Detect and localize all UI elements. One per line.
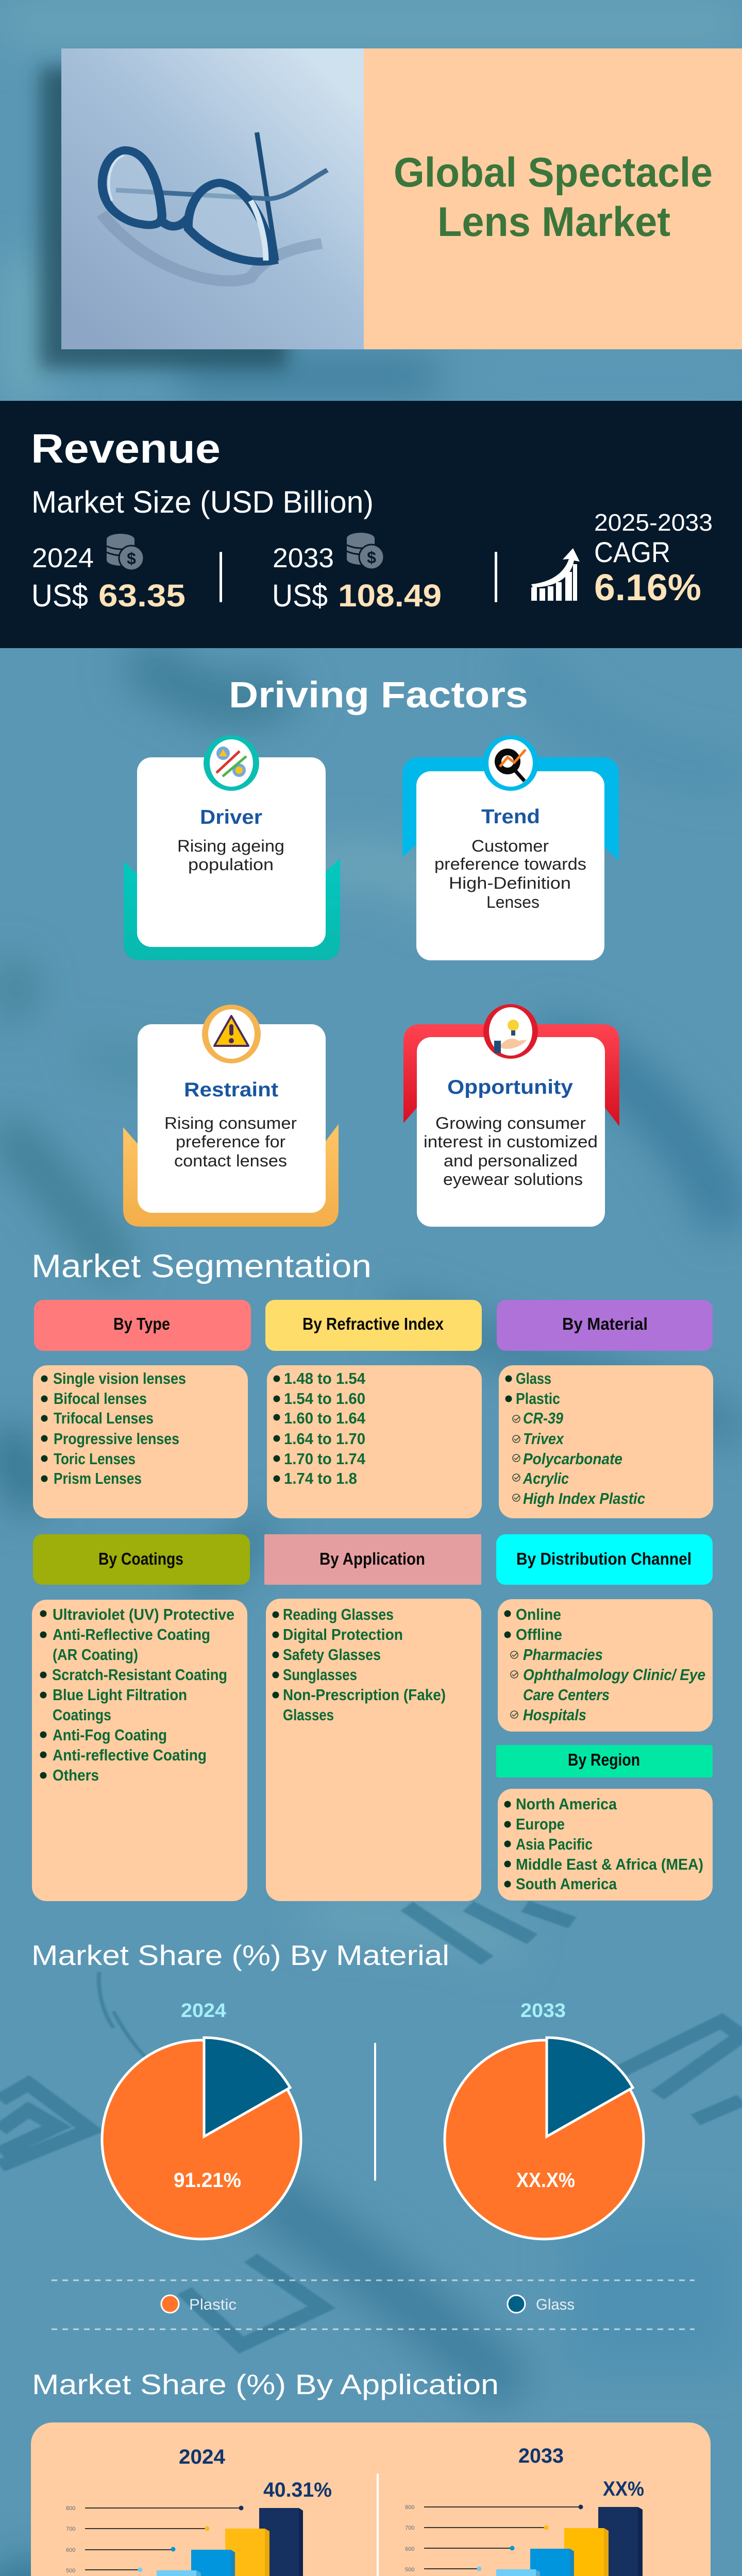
card: restraint: preference for	[176, 1132, 285, 1151]
bar chart 2033	[405, 2445, 644, 2576]
legend: material: Plastic	[189, 2296, 237, 2313]
segment: by coatings: Blue Light Filtration	[53, 1686, 187, 1704]
segment: by type: Trifocal Lenses	[54, 1409, 154, 1427]
card: opportunity: interest in customized	[424, 1132, 598, 1151]
bar chart 2033: 800	[405, 2504, 414, 2511]
chart: pie 2024: 91.21%	[174, 2169, 241, 2192]
chart: pie 2033: 2033	[520, 2000, 566, 2022]
segment: by type: By Type	[113, 1314, 170, 1333]
chart: pie 2033	[445, 2000, 644, 2239]
bar chart 2024: 700	[66, 2526, 75, 2532]
segment: by coatings: (AR Coating)	[53, 1646, 138, 1664]
segment: by type: Toric Lenses	[54, 1450, 136, 1468]
card: trend	[402, 735, 619, 960]
2033 value	[272, 543, 442, 613]
segment: by refractive index: 1.48 to 1.54	[284, 1369, 366, 1387]
segment: by application: Reading Glasses	[283, 1605, 394, 1623]
segment: by application: Sunglasses	[283, 1666, 357, 1684]
title panel: Lens Market	[437, 199, 670, 245]
segment: by type: Bifocal lenses	[54, 1389, 147, 1408]
CAGR block: 2025-2033	[594, 509, 713, 536]
chart: pie 2033: XX.X%	[516, 2169, 575, 2192]
icon: coins 2033	[347, 533, 384, 569]
2024 value: US$	[31, 578, 88, 613]
icon: coins 2024: $	[127, 549, 136, 568]
chart: pie 2024: 2024	[181, 2000, 226, 2022]
segment: by distribution channel: Online	[516, 1605, 561, 1623]
icon: coins 2033: $	[367, 548, 376, 567]
2033 value: 2033	[273, 543, 334, 573]
heading: driving factors: Driving Factors	[229, 675, 528, 716]
segment: by distribution channel: Pharmacies	[523, 1646, 603, 1664]
segment: by distribution channel: Ophthalmology Clinic/ Eye	[523, 1666, 705, 1684]
icon: driver	[204, 735, 259, 791]
segment: by refractive index: 1.54 to 1.60	[284, 1389, 365, 1408]
card: driver: population	[188, 855, 274, 874]
bar chart 2033: 2033	[518, 2445, 564, 2467]
segment: by region: North America	[516, 1795, 617, 1813]
hero photo: spectacles	[61, 48, 364, 349]
card: trend: Customer	[471, 837, 549, 855]
segment: by refractive index: 1.70 to 1.74	[284, 1450, 366, 1468]
card: driver: Rising ageing	[177, 837, 284, 855]
2033 value: 108.49	[338, 578, 442, 613]
segment: by distribution channel: Hospitals	[523, 1706, 586, 1724]
segment: by coatings: Anti-Reflective Coating	[53, 1625, 210, 1643]
card: opportunity: Opportunity	[447, 1076, 573, 1098]
bar chart 2033: 600	[405, 2546, 414, 2552]
segment: by type	[33, 1300, 251, 1518]
hero panel	[40, 48, 742, 368]
segment: by distribution channel	[496, 1534, 713, 1732]
segment: by material: By Material	[562, 1314, 648, 1333]
chart: pie 2024	[102, 2000, 301, 2239]
segment: by region: South America	[516, 1875, 617, 1893]
segment: by distribution channel: By Distribution Channel	[516, 1549, 692, 1568]
market size label: Market Size (USD Billion)	[31, 485, 374, 519]
card: driver: Driver	[200, 806, 262, 828]
card: trend: High-Definition	[449, 874, 571, 892]
bar chart 2024: 500	[66, 2568, 75, 2574]
segment: by material: Plastic	[516, 1389, 560, 1408]
heading: market segmentation: Market Segmentation	[31, 1248, 372, 1284]
segment: by region	[496, 1745, 713, 1901]
segment: by region: Middle East & Africa (MEA)	[516, 1855, 703, 1873]
segment: by application	[264, 1534, 481, 1901]
CAGR block: 6.16%	[594, 567, 701, 608]
segment: by coatings: Others	[53, 1766, 99, 1784]
card: trend: Lenses	[486, 893, 539, 911]
segment: by coatings: Scratch-Resistant Coating	[52, 1666, 227, 1684]
bar chart 2024: 800	[66, 2505, 75, 2512]
segment: by application: Glasses	[283, 1706, 334, 1724]
icon: opportunity	[483, 1004, 538, 1059]
segment: by material: CR-39	[523, 1409, 564, 1427]
segment: by application: Digital Protection	[283, 1625, 403, 1643]
title panel: Global Spectacle	[394, 149, 713, 196]
bar chart 2024: 2024	[179, 2446, 226, 2468]
bar chart 2024	[66, 2446, 332, 2576]
bar chart 2033: 700	[405, 2525, 414, 2531]
revenue heading: Revenue	[31, 426, 221, 471]
card: driver	[124, 735, 340, 960]
segment: by coatings: By Coatings	[98, 1549, 183, 1568]
2024 value: 2024	[32, 543, 94, 573]
heading: market share by application: Market Share (%) By Application	[32, 2368, 499, 2400]
segment: by coatings: Anti-reflective Coating	[53, 1746, 207, 1764]
card: trend: preference towards	[434, 855, 586, 873]
2033 value: US$	[272, 578, 328, 613]
card: restraint: Rising consumer	[164, 1114, 297, 1132]
CAGR block: CAGR	[594, 536, 670, 568]
card: opportunity: eyewear solutions	[443, 1170, 583, 1189]
divider	[495, 552, 497, 602]
card: restraint: Restraint	[184, 1079, 278, 1101]
icon: growth chart	[531, 548, 580, 601]
segment: by region: Asia Pacific	[516, 1835, 593, 1853]
card: opportunity: Growing consumer	[435, 1114, 586, 1132]
card: opportunity	[403, 1004, 619, 1227]
segment: by distribution channel: Care Centers	[523, 1686, 610, 1704]
icon: restraint	[202, 1005, 261, 1063]
segment: by coatings: Ultraviolet (UV) Protective	[53, 1605, 234, 1623]
segment: by material: High Index Plastic	[523, 1489, 645, 1507]
segment: by application: By Application	[319, 1549, 425, 1568]
segment: by application: Non-Prescription (Fake)	[283, 1686, 446, 1704]
segment: by refractive index: 1.60 to 1.64	[284, 1409, 366, 1427]
segment: by material	[497, 1300, 713, 1518]
legend: material: Glass	[536, 2296, 575, 2313]
card: opportunity: and personalized	[444, 1151, 578, 1170]
segment: by distribution channel: Offline	[516, 1625, 562, 1643]
segment: by refractive index: 1.64 to 1.70	[284, 1430, 365, 1448]
segment: by coatings: Coatings	[53, 1706, 111, 1724]
card: restraint: contact lenses	[174, 1151, 287, 1170]
revenue band	[0, 401, 742, 648]
card: restraint	[123, 1005, 339, 1227]
segment: by region: Europe	[516, 1815, 565, 1833]
segment: by refractive index: By Refractive Index	[302, 1314, 444, 1333]
divider	[220, 552, 222, 602]
segment: by type: Single vision lenses	[53, 1369, 186, 1387]
segment: by refractive index: 1.74 to 1.8	[284, 1469, 357, 1487]
segment: by type: Prism Lenses	[54, 1469, 142, 1487]
bar chart 2033: 500	[405, 2567, 414, 2573]
segment: by material: Glass	[516, 1369, 551, 1387]
segment: by material: Polycarbonate	[523, 1450, 622, 1468]
bar chart 2024: 600	[66, 2547, 75, 2553]
panel: application bar charts	[31, 2422, 711, 2576]
segment: by type: Progressive lenses	[54, 1430, 179, 1448]
segment: by refractive index	[265, 1300, 482, 1518]
legend: material	[161, 2295, 575, 2313]
heading: market share by material: Market Share (%) By Material	[31, 1939, 449, 1971]
2024 value	[31, 543, 185, 613]
CAGR block	[594, 509, 713, 608]
title panel	[364, 48, 742, 349]
card: trend: Trend	[481, 806, 540, 828]
2024 value: 63.35	[98, 578, 185, 613]
icon: trend	[483, 735, 538, 791]
segment: by application: Safety Glasses	[283, 1646, 381, 1664]
segment: by material: Acrylic	[522, 1469, 569, 1487]
segment: by region: By Region	[568, 1750, 640, 1769]
bar chart 2024: 40.31%	[263, 2479, 332, 2501]
icon: coins 2024	[107, 534, 144, 570]
segment: by coatings	[32, 1534, 250, 1901]
segment: by coatings: Anti-Fog Coating	[53, 1726, 167, 1744]
bar chart 2033: XX%	[603, 2478, 644, 2500]
segment: by material: Trivex	[523, 1430, 565, 1448]
